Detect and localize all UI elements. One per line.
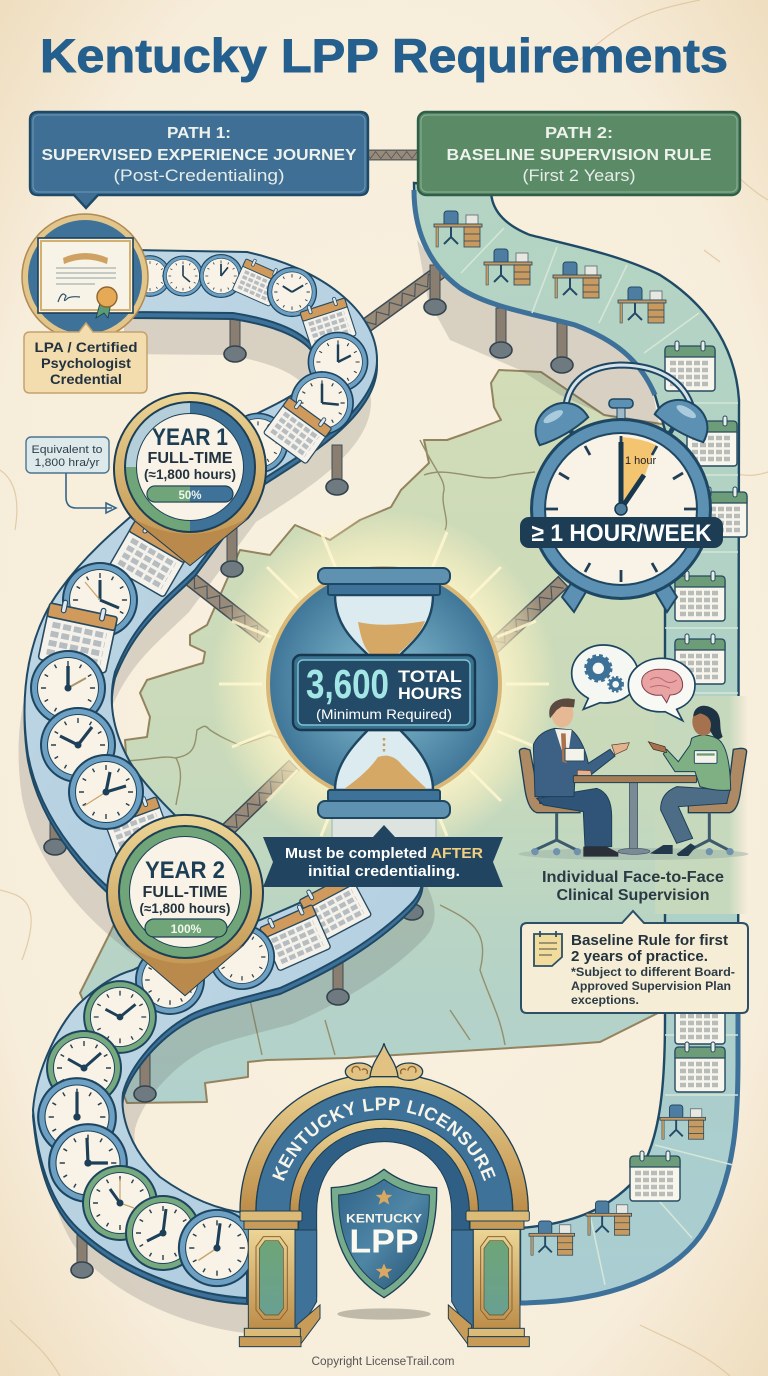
callout: equivalent to 1,800 hours [26,437,116,513]
speech bubble: brain [628,658,695,721]
right pillar [448,1211,529,1347]
clocks and calendars on the left bend [30,516,193,861]
pin: year 1: (≈1,800 hours) [144,467,236,482]
clocks and calendars on the lower bend [37,869,372,1287]
glow and rays [209,509,559,859]
alarm clock: 1 hour per week: 1 hour [625,455,657,467]
hours per week label: ≥ 1 HOUR/WEEK [532,520,712,547]
arch lettering [278,1110,490,1216]
header: path 2 [418,112,740,195]
alarm clock: 1 hour per week [520,365,723,612]
road shadows on the ground [19,240,660,1334]
arch bands [239,1076,529,1297]
pin: year 2: YEAR 2 [145,857,225,884]
ribbon: must be completed after credentialing: initial credentialing. [308,863,460,880]
callout: baseline rule: Approved Supervision Plan [571,979,731,993]
total hours plaque: (Minimum Required) [316,706,452,722]
shield: Kentucky LPP: KENTUCKY [346,1212,423,1226]
Kentucky state map [80,370,700,1103]
total hours plaque [293,655,475,730]
caption: individual clinical supervision: Individual Face-to-Face [542,869,724,886]
icon: calendars along path 2 [630,341,747,1201]
callout: equivalent to 1,800 hours: Equivalent to [32,444,102,456]
shield: Kentucky LPP [331,1169,437,1298]
header: path 2: PATH 2: [545,125,613,142]
icon: notepad [534,931,562,966]
callout: equivalent to 1,800 hours: 1,800 hra/yr [34,457,100,469]
callout: baseline rule [521,911,748,1013]
progress bar 100%: 100% [171,922,202,936]
title: Kentucky LPP Requirements [40,29,728,82]
caption: individual clinical supervision: Clinical Supervision [556,887,710,904]
pin: year 2: FULL-TIME [142,884,228,901]
callout: baseline rule: 2 years of practice. [571,949,708,965]
credential label: Credential [50,371,122,387]
arrow to year 1 [66,473,116,513]
callout: baseline rule: *Subject to different Board- [571,965,735,979]
pin: year 1 [114,393,266,565]
total hours plaque: HOURS [398,684,462,703]
support pillars [44,265,573,1278]
hourglass glass and sand [318,568,450,818]
ground shadow [337,1308,431,1320]
icon: left bell [526,393,590,448]
progress bar 50%: 50% [178,490,202,502]
steel truss connectors [181,150,568,840]
progress bar 100% [145,919,227,937]
arch crown ornament [345,1043,423,1080]
caption: individual clinical supervision [542,869,724,904]
icon: right bell [653,390,717,445]
pin: year 2: (≈1,800 hours) [140,901,230,916]
progress bar 50% [147,486,233,502]
licensure archway [238,1043,530,1348]
supervisee figure [648,706,747,856]
icon: certificate [38,238,133,318]
credential label [24,323,147,393]
header: path 2: BASELINE SUPERVISION RULE [446,147,712,164]
central hourglass: 3,600 total hours [209,509,559,859]
icon: desks along path 2 [434,211,706,1255]
credential label: LPA / Certified [34,339,138,355]
header: path 1: (Post-Credentialing) [114,166,284,185]
credential label: Psychologist [41,355,131,371]
header: path 1: SUPERVISED EXPERIENCE JOURNEY [42,147,357,164]
path 1 road: second year [33,850,423,1304]
path 2 road: desks and calendars [414,183,747,1303]
header: path 2: (First 2 Years) [522,166,636,185]
pin: year 2 [107,815,263,995]
header: path 1: PATH 1: [167,125,231,142]
credential medallion [22,214,148,340]
meeting table [573,776,697,854]
clocks and calendars on the upper loop [129,254,368,473]
total hours plaque: 3,600 [306,661,389,707]
callout: baseline rule: Baseline Rule for first [571,933,728,949]
callout: baseline rule: exceptions. [571,993,639,1007]
path 1 road: first year [25,250,377,926]
ribbon: must be completed after credentialing [263,825,503,887]
ribbon: must be completed after credentialing: Must be completed AFTER [285,845,483,862]
soft green wash behind the supervision scene [655,696,747,914]
copyright: Copyright LicenseTrail.com [312,1356,454,1368]
supervisor figure [519,698,629,857]
illustration: individual face-to-face supervision [518,645,748,860]
pin: year 1: FULL-TIME [148,450,233,467]
shield: Kentucky LPP: LPP [349,1224,419,1261]
left pillar [239,1211,320,1347]
speech bubble: gears [572,645,638,709]
arch bands: KENTUCKY LPP LICENSURE [272,1098,496,1181]
pin: year 1: YEAR 1 [152,424,228,451]
header: path 1 [30,112,368,208]
total hours plaque: TOTAL [398,667,462,686]
